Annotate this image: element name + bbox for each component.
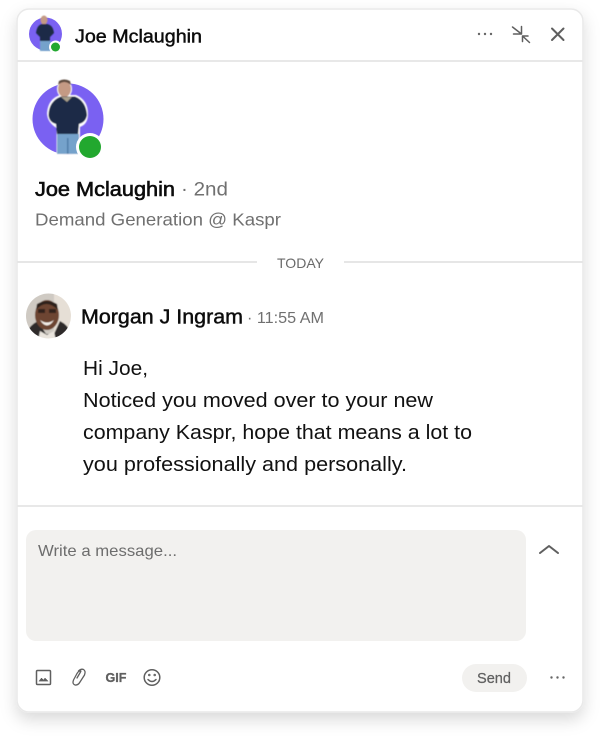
icon: close xyxy=(552,28,564,40)
timestamp: · 11:55 AM xyxy=(247,310,324,327)
icon: expand chevron xyxy=(540,546,558,553)
message line 1: Noticed you moved over to your new xyxy=(83,390,434,412)
message body xyxy=(83,358,472,476)
message line 2: company Kaspr, hope that means a lot to xyxy=(83,422,472,444)
header divider xyxy=(17,60,583,62)
profile name: Joe Mclaughin xyxy=(35,179,175,201)
small avatar with status xyxy=(29,16,62,54)
send button xyxy=(462,664,527,692)
footer divider xyxy=(17,505,583,507)
profile headline: Demand Generation @ Kaspr xyxy=(35,210,281,230)
person figure xyxy=(47,80,88,155)
date separator: TODAY xyxy=(277,255,325,271)
message input xyxy=(26,530,526,641)
icon: more options xyxy=(478,33,492,35)
send button: Send xyxy=(477,670,511,687)
header name: Joe Mclaughin xyxy=(75,26,202,46)
Morgan avatar xyxy=(26,294,71,338)
greeting line: Hi Joe, xyxy=(83,358,148,380)
message line 3: you professionally and personally. xyxy=(83,454,407,476)
message input: Write a message... xyxy=(38,543,177,560)
icon: paperclip xyxy=(73,669,85,685)
large avatar with status xyxy=(32,80,104,161)
icon: GIF: GIF xyxy=(106,670,127,685)
icon: more send options xyxy=(550,676,565,679)
sender name: Morgan J Ingram xyxy=(81,306,243,328)
icon: emoji xyxy=(144,670,160,685)
icon: collapse arrows xyxy=(512,26,530,42)
icon: image xyxy=(36,670,50,684)
connection degree: · 2nd xyxy=(181,178,228,200)
